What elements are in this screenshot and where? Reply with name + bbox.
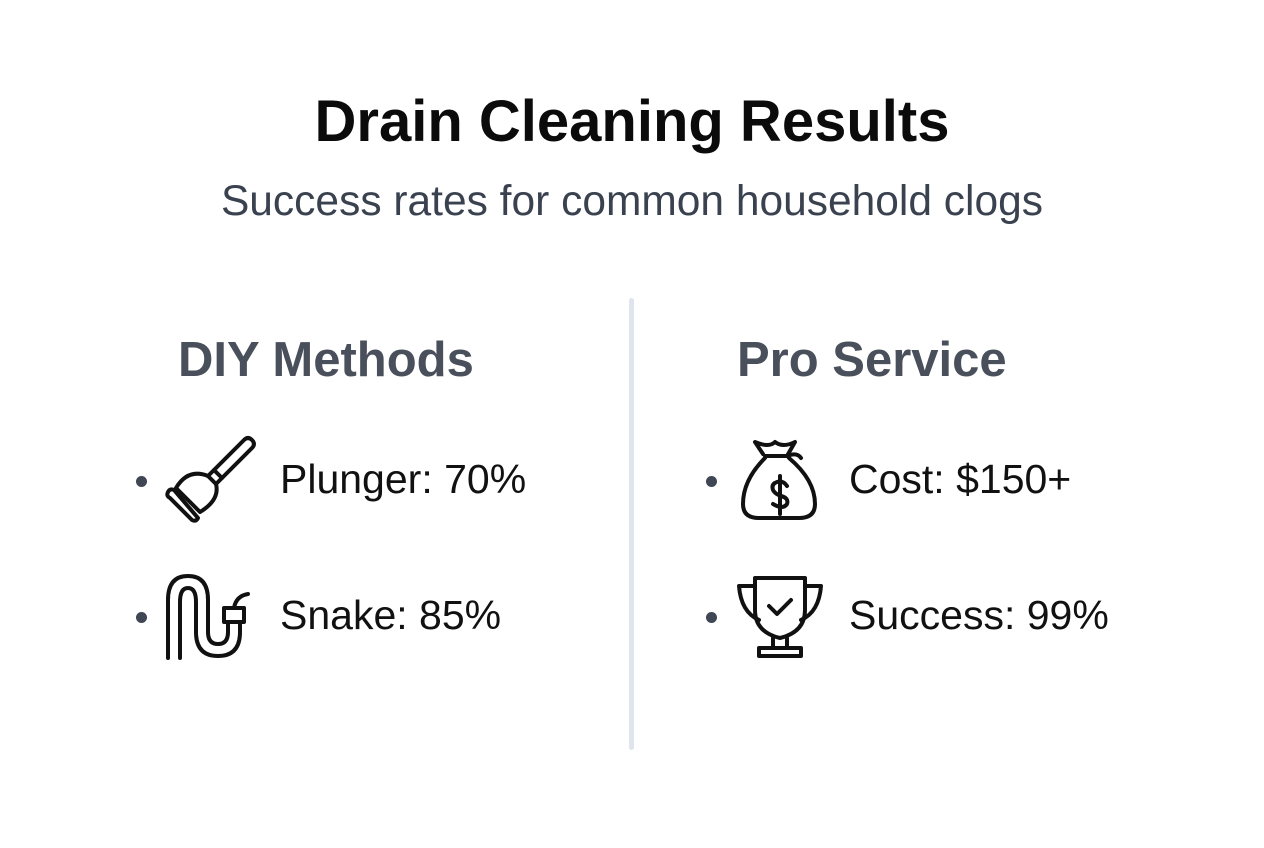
bullet: success [706, 612, 717, 623]
text: cost: Cost: $150+ [849, 456, 1071, 502]
heading: Pro Service: Pro Service [737, 333, 1007, 387]
divider [629, 298, 634, 750]
text: success: Success: 99% [849, 592, 1109, 638]
bullet: plunger [136, 476, 147, 487]
icon: snake [166, 574, 250, 660]
subtitle: Success rates for common household clogs [221, 178, 1043, 225]
text: snake: Snake: 85% [280, 592, 501, 638]
bullet: cost [706, 476, 717, 487]
text: plunger: Plunger: 70% [280, 456, 526, 502]
icon: plunger [165, 436, 256, 523]
icon: money bag [741, 440, 817, 520]
bullet: snake [136, 612, 147, 623]
heading: DIY Methods: DIY Methods [178, 333, 474, 387]
icon: trophy [737, 576, 823, 658]
title: Drain Cleaning Results [315, 89, 949, 154]
